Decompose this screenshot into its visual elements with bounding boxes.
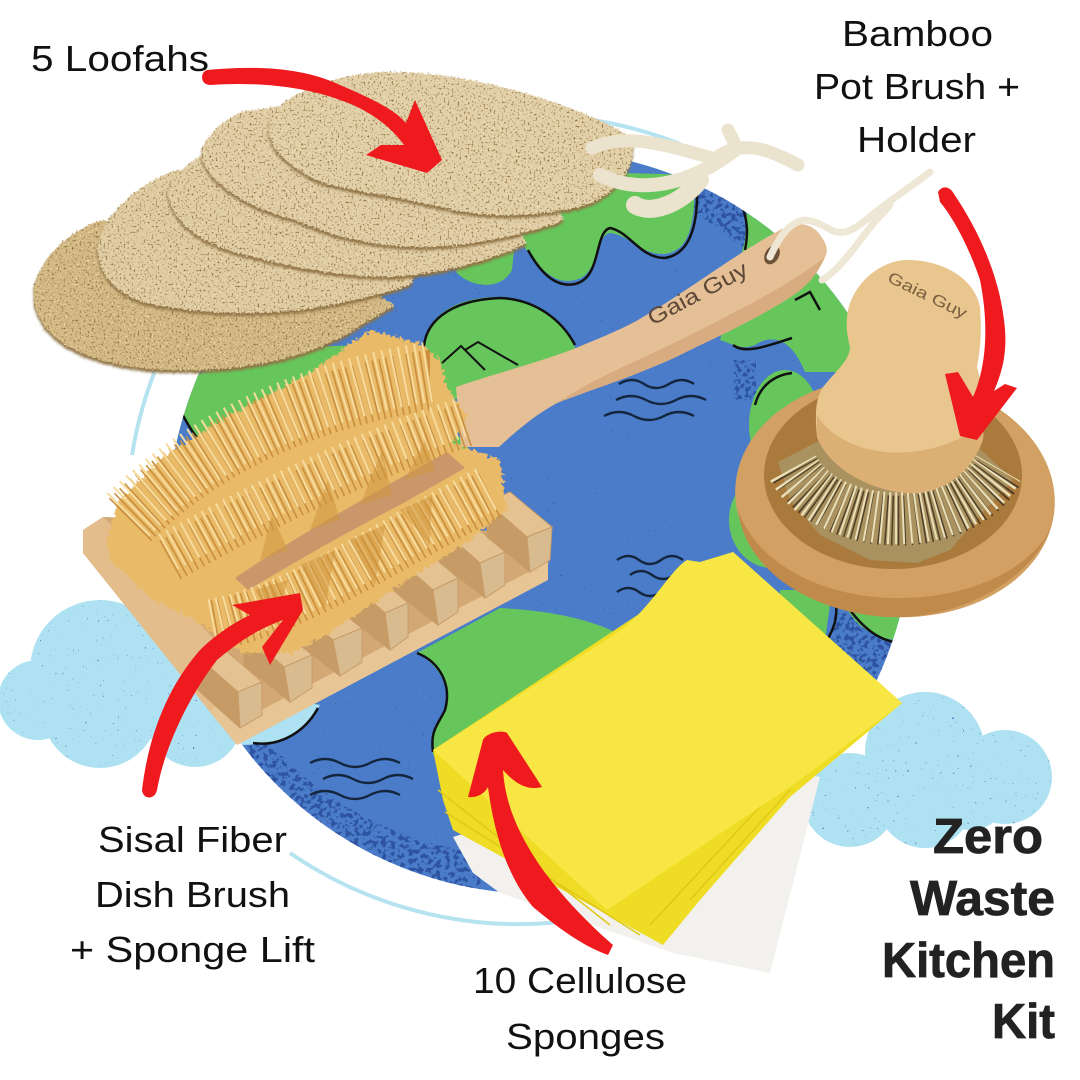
soap rack bbox=[83, 492, 552, 745]
mountains bbox=[442, 342, 518, 370]
background ring arcs bbox=[132, 115, 680, 924]
dish brush bristles bbox=[107, 330, 507, 653]
loofah 4 bbox=[201, 100, 564, 247]
label: Bamboo Pot Brush + Holder: Holder bbox=[857, 119, 976, 160]
label: 5 Loofahs: 5 Loofahs bbox=[31, 38, 209, 79]
ocean bbox=[175, 161, 900, 892]
cloud left bbox=[0, 600, 236, 768]
dark hairs bbox=[130, 380, 490, 625]
label: 10 Cellulose Sponges bbox=[473, 960, 687, 1057]
handle bbox=[456, 224, 827, 447]
pot brush bbox=[727, 260, 1063, 628]
title: Kit bbox=[992, 995, 1055, 1049]
title: Kitchen bbox=[882, 934, 1055, 988]
holder bbox=[727, 366, 1063, 628]
land: upper right bbox=[720, 212, 850, 372]
label: Sisal Fiber Dish Brush + Sponge Lift: + Sponge Lift bbox=[70, 929, 315, 970]
title: Waste bbox=[910, 872, 1055, 926]
loofahs bbox=[34, 72, 633, 370]
tuft valleys bbox=[255, 440, 435, 625]
label: Bamboo Pot Brush + Holder: Pot Brush + bbox=[814, 66, 1020, 107]
arrow: sponges bbox=[468, 732, 613, 955]
light hairs bbox=[128, 372, 488, 622]
label: 10 Cellulose Sponges: Sponges bbox=[506, 1016, 665, 1057]
wood strip bbox=[235, 452, 465, 590]
loofah 3 bbox=[168, 140, 526, 277]
rope hole bbox=[761, 243, 783, 267]
loofah 5 top bbox=[268, 72, 633, 215]
head logo: Gaia Guy bbox=[885, 269, 969, 322]
head lower shade bbox=[817, 415, 983, 493]
label: Sisal Fiber Dish Brush + Sponge Lift bbox=[70, 819, 315, 970]
loofah 1 bbox=[34, 220, 395, 370]
title bbox=[882, 810, 1055, 1049]
rack floor bbox=[83, 517, 552, 725]
waves bbox=[310, 380, 706, 799]
arrow: dish brush bbox=[142, 593, 303, 798]
cloud patch bbox=[241, 704, 320, 745]
bristles bbox=[778, 430, 1013, 563]
land: right peninsula bbox=[749, 370, 814, 441]
handle logo: Gaia Guy bbox=[643, 257, 752, 330]
globe bbox=[175, 161, 900, 892]
ocean dense stipple bbox=[215, 185, 890, 888]
land: lower centre bbox=[418, 608, 613, 755]
head bbox=[816, 260, 983, 493]
pot brush rope bbox=[770, 172, 930, 280]
arrow: loofahs bbox=[202, 68, 442, 173]
title: Zero bbox=[933, 810, 1043, 864]
lower yellow sheets bbox=[433, 552, 902, 945]
cloud right bbox=[808, 692, 1052, 848]
label: Bamboo Pot Brush + Holder: Bamboo bbox=[842, 13, 993, 54]
label: 10 Cellulose Sponges: 10 Cellulose bbox=[473, 960, 687, 1001]
land: centre hill bbox=[423, 297, 576, 400]
loofah 2 bbox=[97, 170, 420, 313]
label: Bamboo Pot Brush + Holder bbox=[814, 13, 1020, 160]
label: Sisal Fiber Dish Brush + Sponge Lift: Dish Brush bbox=[95, 874, 290, 915]
white sheets bbox=[453, 760, 820, 973]
arrows bbox=[142, 68, 1017, 955]
land: lower right bbox=[780, 590, 900, 640]
sponges bbox=[433, 552, 902, 973]
arrow: pot brush bbox=[938, 187, 1017, 440]
label: Sisal Fiber Dish Brush + Sponge Lift: Sisal Fiber bbox=[98, 819, 287, 860]
loofah rope bbox=[592, 130, 798, 209]
rack left rail bbox=[83, 517, 250, 745]
rack front rail bbox=[210, 562, 548, 745]
land: top bbox=[520, 170, 695, 281]
rack blocks bbox=[198, 492, 552, 728]
land: left bbox=[175, 346, 470, 450]
top yellow sheet bbox=[433, 552, 902, 910]
handle shading bbox=[557, 257, 825, 403]
